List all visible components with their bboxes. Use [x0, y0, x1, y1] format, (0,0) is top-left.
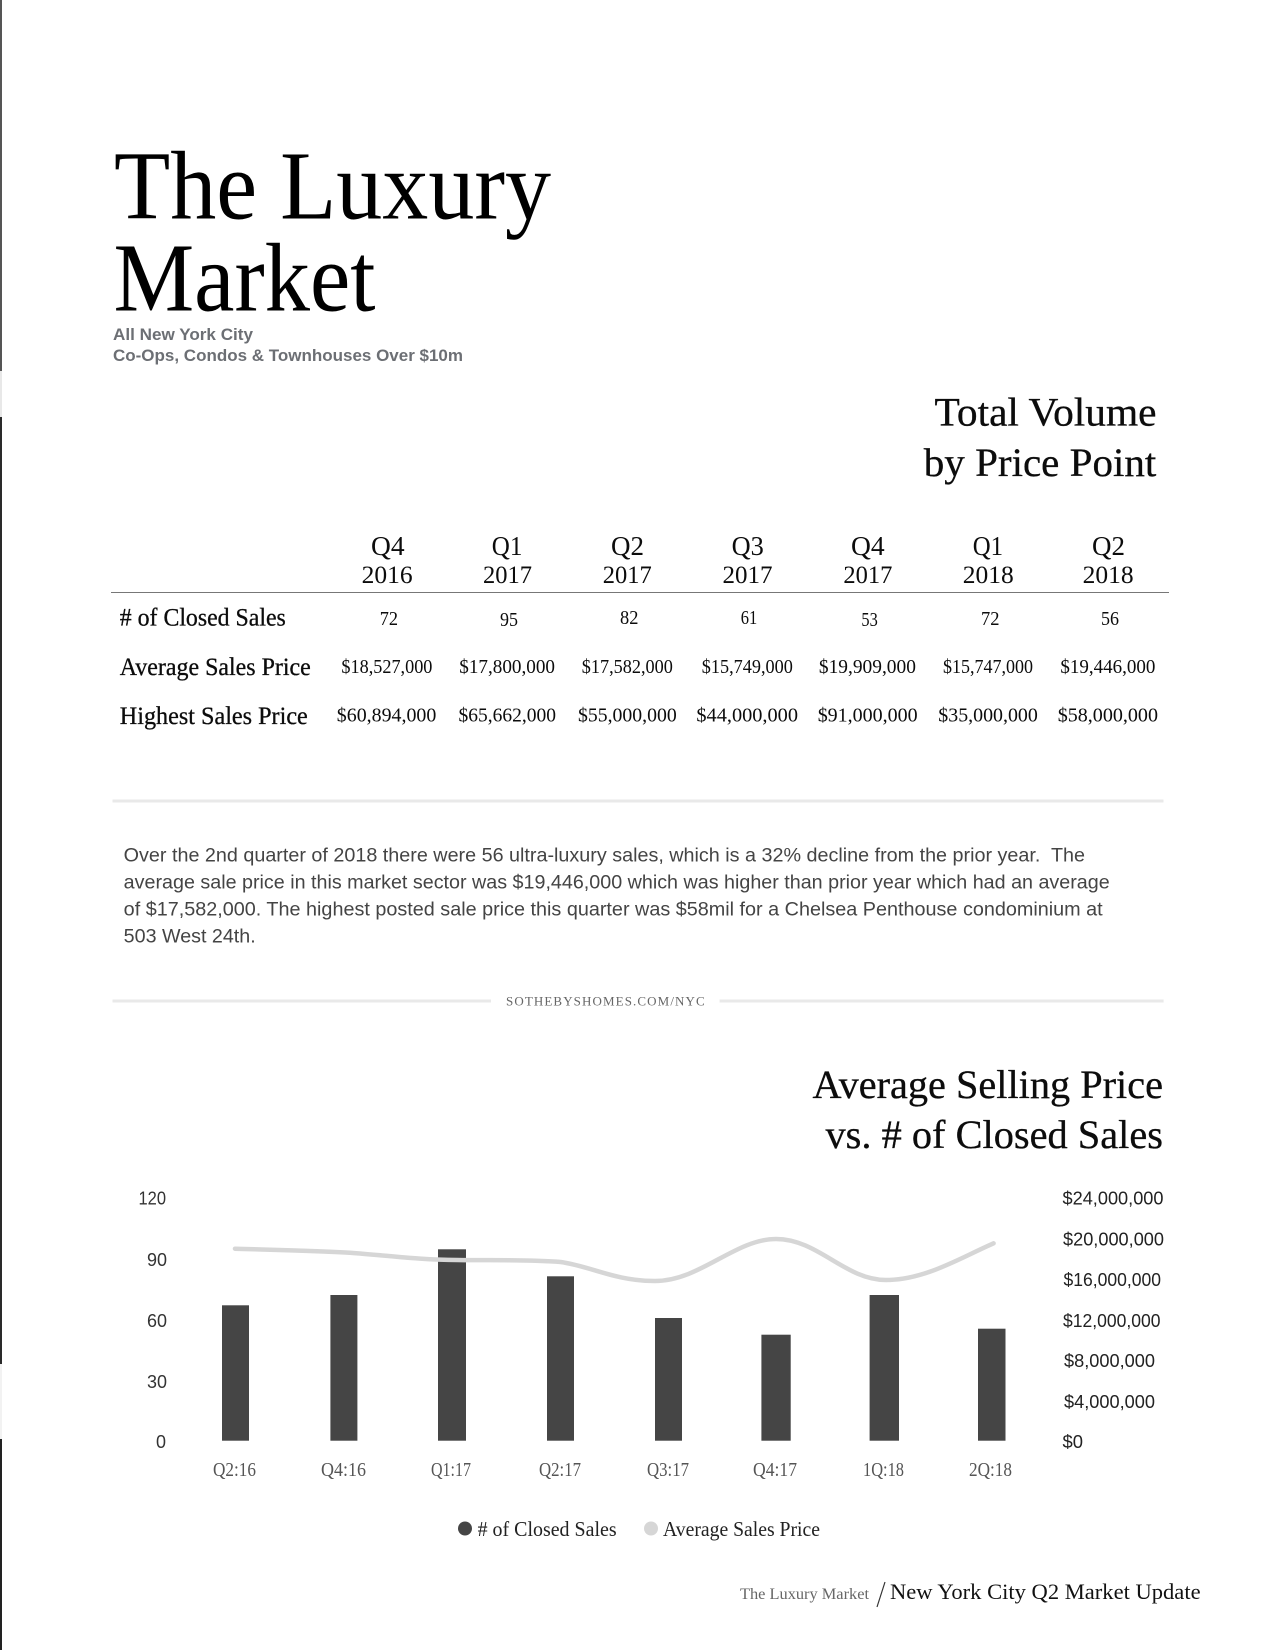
right axis labels: $0: [1062, 1432, 1083, 1452]
website divider: [112, 994, 1164, 1008]
row: highest sales price: Highest Sales Price: [120, 703, 308, 730]
table column headers: 2016: [362, 562, 413, 589]
heading: total volume by price point: [924, 390, 1156, 485]
row: average sales price: $18,527,000: [341, 656, 432, 678]
right axis labels: $8,000,000: [1064, 1351, 1155, 1371]
row: highest sales price: $91,000,000: [818, 704, 918, 726]
table column headers: [362, 531, 1134, 589]
left edge strip: [0, 0, 2, 1650]
heading: average selling price vs closed sales: vs. # of Closed Sales: [826, 1112, 1163, 1157]
heading: average selling price vs closed sales: Average Selling Price: [812, 1062, 1163, 1107]
row: highest sales price: $60,894,000: [337, 704, 436, 726]
table column headers: Q1: [492, 531, 522, 561]
footer: [740, 1579, 1201, 1607]
table: quarterly sales: [111, 531, 1169, 730]
x axis labels: Q2:16: [213, 1459, 256, 1481]
title: [114, 133, 551, 332]
table column headers: 2017: [603, 562, 652, 589]
bars: closed sales: [222, 1249, 1006, 1441]
row: highest sales price: [120, 703, 1158, 730]
x axis labels: Q4:16: [321, 1459, 366, 1481]
table column headers: Q3: [732, 531, 764, 561]
row: closed sales: 56: [1101, 608, 1119, 630]
row: closed sales: # of Closed Sales: [120, 605, 286, 632]
heading: average selling price vs closed sales: [812, 1062, 1163, 1157]
table column headers: 2017: [843, 562, 892, 589]
x axis labels: [213, 1459, 1012, 1481]
table column headers: 2018: [1083, 562, 1134, 589]
x axis labels: Q2:17: [539, 1459, 581, 1481]
row: average sales price: $17,800,000: [459, 656, 555, 678]
row: highest sales price: $44,000,000: [696, 704, 798, 726]
x axis labels: Q3:17: [647, 1459, 689, 1481]
row: closed sales: [120, 605, 1119, 632]
footer: The Luxury Market: [740, 1586, 870, 1603]
row: closed sales: 95: [500, 609, 518, 631]
right axis labels: $24,000,000: [1062, 1188, 1164, 1208]
body paragraph: [124, 846, 1110, 948]
table column headers: 2017: [483, 562, 532, 589]
left axis labels: 90: [147, 1250, 167, 1270]
row: average sales price: $15,749,000: [702, 656, 793, 678]
footer: New York City Q2 Market Update: [890, 1579, 1201, 1604]
row: highest sales price: $35,000,000: [938, 704, 1038, 726]
table column headers: Q4: [851, 531, 885, 561]
row: highest sales price: $65,662,000: [458, 704, 556, 726]
legend: Average Sales Price: [663, 1517, 820, 1541]
legend: [458, 1517, 820, 1541]
x axis labels: Q4:17: [753, 1459, 797, 1481]
body paragraph: Over the 2nd quarter of 2018 there were 56 ultra-luxury sales, which is a 32% decline from the prior year. The: [124, 846, 1085, 867]
row: average sales price: $19,909,000: [819, 656, 916, 678]
table column headers: 2018: [963, 562, 1014, 589]
subtitle: Co-Ops, Condos & Townhouses Over $10m: [113, 346, 463, 365]
title: Market: [114, 225, 376, 332]
title: The Luxury: [114, 133, 551, 240]
row: average sales price: $17,582,000: [582, 656, 673, 678]
left axis labels: 30: [147, 1372, 167, 1392]
row: average sales price: Average Sales Price: [120, 654, 311, 681]
legend: # of Closed Sales: [478, 1517, 617, 1541]
heading: total volume by price point: by Price Point: [924, 440, 1156, 485]
table column headers: Q1: [973, 531, 1003, 561]
right axis labels: [1062, 1188, 1164, 1452]
x axis labels: 1Q:18: [863, 1459, 904, 1481]
row: closed sales: 53: [861, 609, 878, 631]
row: closed sales: 72: [981, 608, 1000, 630]
line: average sales price: [235, 1239, 994, 1281]
right axis labels: $20,000,000: [1063, 1229, 1164, 1249]
right axis labels: $4,000,000: [1064, 1392, 1155, 1412]
right axis labels: $12,000,000: [1063, 1311, 1160, 1331]
table column headers: Q2: [611, 531, 644, 561]
subtitle: All New York City: [113, 325, 254, 344]
row: highest sales price: $58,000,000: [1058, 704, 1158, 726]
table column headers: Q4: [371, 531, 405, 561]
right axis labels: $16,000,000: [1064, 1270, 1161, 1290]
row: closed sales: 61: [741, 607, 757, 629]
subtitle: [113, 325, 463, 365]
heading: total volume by price point: Total Volume: [934, 390, 1156, 435]
left axis labels: [138, 1188, 167, 1452]
website divider: SOTHEBYSHOMES.COM/NYC: [506, 994, 705, 1008]
table column headers: 2017: [722, 562, 772, 589]
row: average sales price: [120, 654, 1155, 681]
body paragraph: average sale price in this market sector was $19,446,000 which was higher than prior year which had an average: [124, 873, 1110, 894]
body paragraph: of $17,582,000. The highest posted sale price this quarter was $58mil for a Chelsea Penthouse condominium at: [124, 900, 1103, 921]
row: closed sales: 72: [380, 608, 398, 630]
left axis labels: 120: [138, 1188, 166, 1208]
chart: average selling price vs closed sales: [138, 1188, 1164, 1541]
row: average sales price: $15,747,000: [943, 656, 1033, 678]
table column headers: Q2: [1092, 531, 1125, 561]
row: average sales price: $19,446,000: [1060, 656, 1155, 678]
left axis labels: 60: [147, 1311, 167, 1331]
row: closed sales: 82: [620, 607, 638, 629]
x axis labels: 2Q:18: [969, 1459, 1012, 1481]
row: highest sales price: $55,000,000: [578, 704, 677, 726]
x axis labels: Q1:17: [431, 1459, 471, 1481]
body paragraph: 503 West 24th.: [124, 927, 256, 948]
left axis labels: 0: [156, 1432, 166, 1452]
